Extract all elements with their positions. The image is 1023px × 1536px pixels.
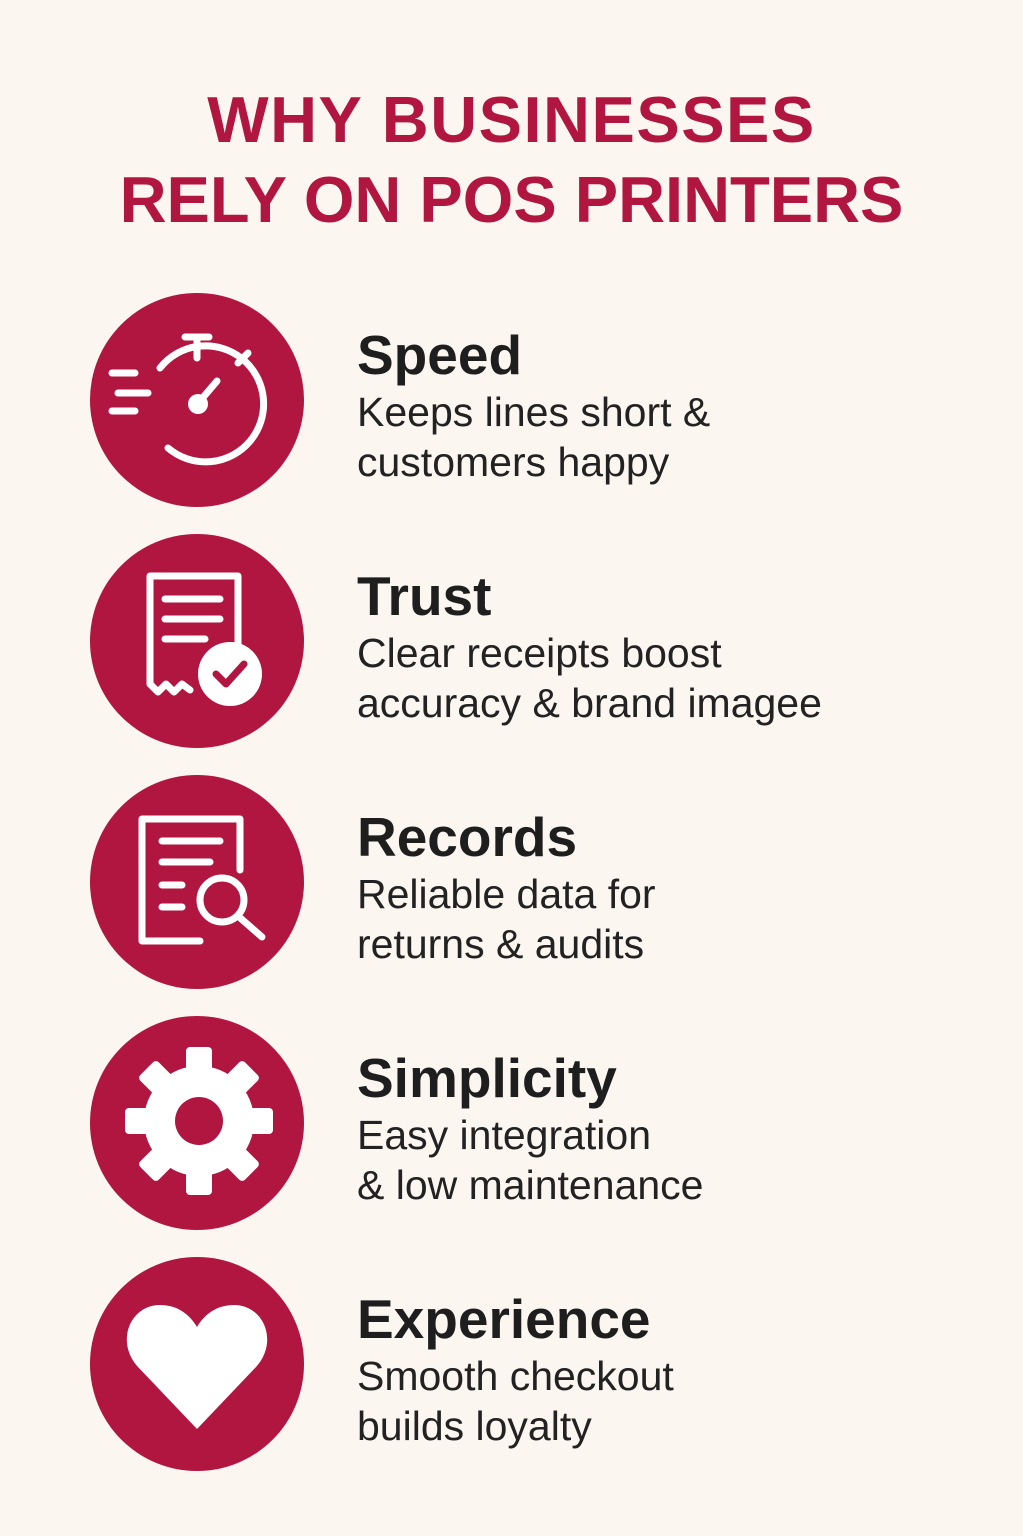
text: speed: customers happy bbox=[357, 439, 669, 485]
text: trust: Clear receipts boost bbox=[357, 630, 722, 676]
text: speed: Speed bbox=[357, 324, 522, 386]
text: experience: builds loyalty bbox=[357, 1403, 592, 1449]
text: speed: Keeps lines short & bbox=[357, 389, 710, 435]
title: WHY BUSINESSES bbox=[207, 83, 816, 156]
panel: simplicity bbox=[90, 1016, 703, 1230]
icon: receipt check bbox=[90, 534, 304, 748]
panel: records bbox=[90, 775, 656, 989]
text: trust bbox=[357, 565, 822, 726]
text: records: returns & audits bbox=[357, 921, 644, 967]
icon: heart bbox=[90, 1257, 304, 1471]
text: experience: Experience bbox=[357, 1288, 651, 1350]
icon: document search bbox=[90, 775, 304, 989]
text: simplicity bbox=[357, 1047, 703, 1208]
text: experience bbox=[357, 1288, 674, 1449]
text: trust: Trust bbox=[357, 565, 491, 627]
panel: speed bbox=[90, 293, 710, 507]
text: trust: accuracy & brand imagee bbox=[357, 680, 822, 726]
icon: gear bbox=[90, 1016, 304, 1230]
icon: stopwatch bbox=[90, 293, 304, 507]
panel: trust bbox=[90, 534, 822, 748]
text: records: Records bbox=[357, 806, 577, 868]
text: simplicity: & low maintenance bbox=[357, 1162, 703, 1208]
text: experience: Smooth checkout bbox=[357, 1353, 674, 1399]
text: records bbox=[357, 806, 656, 967]
text: simplicity: Easy integration bbox=[357, 1112, 651, 1158]
title bbox=[120, 83, 903, 236]
text: speed bbox=[357, 324, 710, 485]
text: records: Reliable data for bbox=[357, 871, 656, 917]
title: RELY ON POS PRINTERS bbox=[120, 163, 903, 236]
panel: experience bbox=[90, 1257, 674, 1471]
text: simplicity: Simplicity bbox=[357, 1047, 617, 1109]
